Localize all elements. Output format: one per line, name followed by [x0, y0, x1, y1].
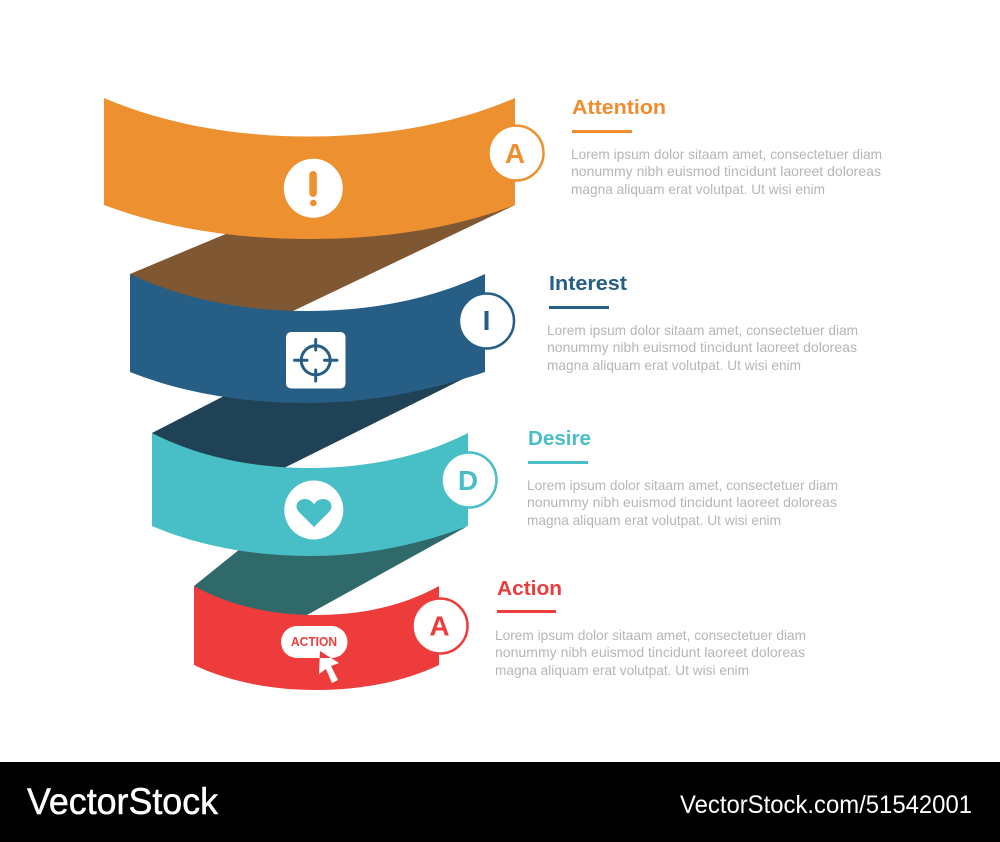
- text block: action: nonummy nibh euismod tincidunt laoreet doloreas: [495, 644, 805, 660]
- text block: attention: Lorem ipsum dolor sitaam amet, consectetuer diam: [571, 146, 882, 162]
- badge: D: D: [458, 465, 478, 496]
- text block: interest: nonummy nibh euismod tincidunt laoreet doloreas: [547, 339, 857, 355]
- text block: attention: magna aliquam erat volutpat. Ut wisi enim: [571, 181, 825, 197]
- footer logo: VectorStock: [27, 781, 218, 822]
- text block: desire: [527, 428, 838, 528]
- icon: action button with cursor: [281, 626, 348, 683]
- shadow: desire to action: [194, 527, 466, 635]
- text block: attention: [571, 97, 882, 197]
- badge: A: A: [505, 138, 525, 169]
- text block: action: Lorem ipsum dolor sitaam amet, consectetuer diam: [495, 627, 806, 643]
- icon: heart: [284, 480, 343, 540]
- text block: action: magna aliquam erat volutpat. Ut wisi enim: [495, 662, 749, 678]
- footer bar: [0, 762, 1000, 842]
- text block: interest: [547, 273, 858, 373]
- band: attention: [104, 98, 544, 239]
- icon: exclamation: [284, 159, 343, 218]
- text block: desire: Lorem ipsum dolor sitaam amet, consectetuer diam: [527, 477, 838, 493]
- shadow: attention to interest: [130, 205, 515, 335]
- text block: attention: Attention: [572, 97, 666, 119]
- text block: attention: nonummy nibh euismod tincidunt laoreet doloreas: [571, 163, 881, 179]
- badge: D: [442, 452, 496, 508]
- band: interest: [130, 274, 514, 403]
- badge: I: I: [483, 305, 490, 336]
- text block: desire: magna aliquam erat volutpat. Ut wisi enim: [527, 512, 781, 528]
- icon: action button with cursor: ACTION: [291, 634, 337, 649]
- text block: interest: magna aliquam erat volutpat. Ut wisi enim: [547, 357, 801, 373]
- badge: I: [459, 294, 514, 348]
- text block: interest: Lorem ipsum dolor sitaam amet, consectetuer diam: [547, 322, 858, 338]
- text block: action: [495, 578, 806, 678]
- badge: A: [412, 598, 468, 654]
- text block: desire: nonummy nibh euismod tincidunt laoreet doloreas: [527, 494, 837, 510]
- badge: A: A: [429, 610, 450, 642]
- text block: action: Action: [497, 578, 562, 600]
- shadow: interest to desire: [152, 374, 472, 490]
- badge: A: [488, 126, 544, 180]
- icon: target: [286, 332, 346, 388]
- text block: interest: Interest: [549, 273, 627, 295]
- text block: desire: Desire: [528, 428, 591, 450]
- band: desire: [152, 433, 496, 556]
- footer url: VectorStock.com/51542001: [680, 791, 972, 819]
- band: action: [194, 586, 468, 690]
